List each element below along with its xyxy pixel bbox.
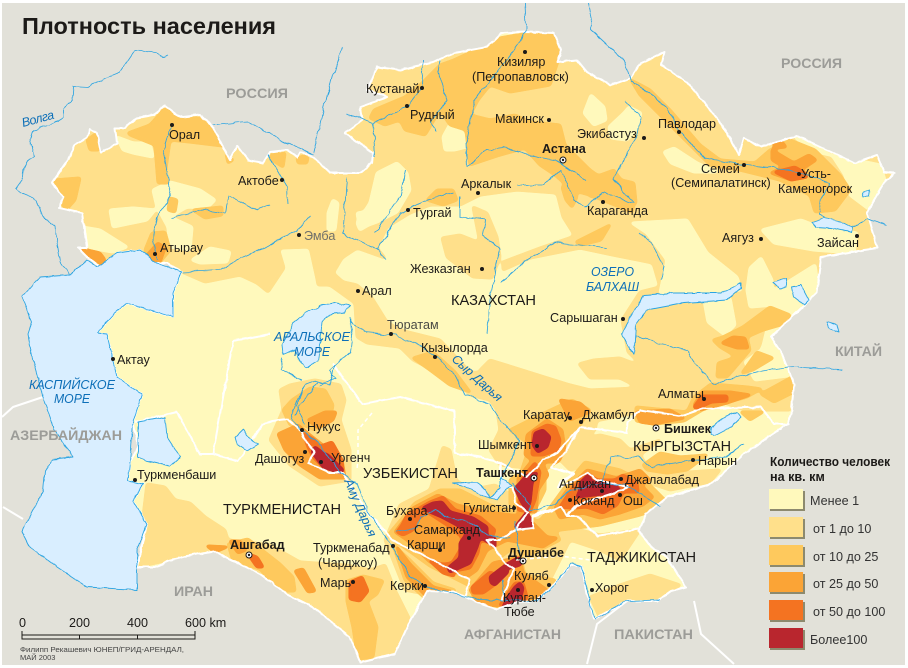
scale bar: 200 — [69, 616, 90, 630]
city labels and dots: Джамбул — [582, 408, 635, 422]
water labels: ОЗЕРО — [591, 265, 634, 279]
water labels: АРАЛЬСКОЕ — [273, 330, 351, 344]
capitals: Ашгабад — [230, 538, 285, 552]
city labels and dots: Джалалабад — [625, 473, 700, 487]
scale bar: 400 — [127, 616, 148, 630]
city labels and dots: Аркалык — [461, 177, 512, 191]
legend: 1 to 10 — [769, 517, 871, 539]
city labels and dots: Шымкент — [478, 438, 533, 452]
city labels and dots: Коканд — [573, 494, 615, 508]
water labels: Сыр Дарья — [449, 352, 505, 405]
city labels and dots: Арал — [362, 284, 392, 298]
city labels and dots: Кизиляр — [497, 55, 545, 69]
scale bar — [19, 616, 226, 639]
city labels and dots: Карши — [407, 538, 445, 552]
density 50 to 100 — [248, 167, 807, 610]
neighbouring country labels: ИРАН — [174, 583, 213, 599]
city labels and dots: Усть- — [801, 167, 831, 181]
title: Плотность населения — [22, 13, 276, 39]
neighbouring country labels: ПАКИСТАН — [614, 626, 693, 642]
water labels: Аму Дарья — [341, 476, 379, 539]
city labels and dots: Туркменабад — [313, 541, 390, 555]
city labels and dots: Тургай — [413, 206, 452, 220]
city labels and dots: Эмба — [304, 229, 335, 243]
legend: under 1: Менее 1 — [810, 494, 859, 508]
capitals: Душанбе — [508, 546, 564, 560]
city labels and dots: Дашогуз — [255, 452, 305, 466]
water labels: КАСПИЙСКОЕ — [29, 376, 116, 392]
city labels and dots: Кустанай — [366, 82, 419, 96]
city labels and dots: Каменогорск — [778, 182, 853, 196]
city labels and dots: Самарканд — [414, 523, 481, 537]
city labels and dots: Курган- — [503, 591, 546, 605]
water labels — [20, 108, 639, 539]
density over 100 — [312, 430, 620, 608]
city labels and dots: Актобе — [238, 174, 279, 188]
city labels and dots: Каратау — [523, 408, 571, 422]
legend: 50 to 100: от 50 до 100 — [813, 605, 885, 619]
city labels and dots: Андижан — [559, 477, 611, 491]
city labels and dots: Экибастуз — [577, 127, 637, 141]
density 25 to 50 — [78, 138, 816, 606]
legend: Количество человек — [770, 455, 891, 469]
legend: 25 to 50: от 25 до 50 — [813, 577, 878, 591]
water labels: БАЛХАШ — [586, 280, 639, 294]
neighbouring country labels: АФГАНИСТАН — [464, 626, 561, 642]
main country labels: КЫРГЫЗСТАН — [633, 438, 731, 455]
city labels and dots: Нукус — [307, 420, 340, 434]
city labels and dots: Сарышаган — [550, 311, 618, 325]
city labels and dots: Туркменбаши — [137, 468, 216, 482]
main country labels: УЗБЕКИСТАН — [363, 465, 458, 482]
city labels and dots: Гулистан — [463, 501, 515, 515]
city labels and dots: Семей — [701, 162, 740, 176]
scale bar: 600 km — [185, 616, 226, 630]
legend: over 100: Более100 — [810, 633, 867, 647]
scale bar: 0 — [19, 616, 26, 630]
capitals: Бишкек — [664, 422, 712, 436]
legend: under 1 — [769, 489, 859, 511]
neighbouring country labels: РОССИЯ — [781, 55, 842, 71]
city labels and dots: Жезказган — [410, 262, 471, 276]
main country labels: КАЗАХСТАН — [451, 292, 536, 309]
neighbouring country labels: АЗЕРБАЙДЖАН — [10, 426, 122, 443]
main country labels: ТУРКМЕНИСТАН — [223, 501, 341, 518]
capitals: Ташкент — [476, 466, 528, 480]
city labels and dots: Кызылорда — [421, 341, 488, 355]
city labels and dots: Аягуз — [722, 231, 754, 245]
city labels and dots: Рудный — [410, 108, 455, 122]
city labels and dots: Хорог — [595, 581, 629, 595]
water labels: МОРЕ — [294, 345, 331, 359]
city labels and dots: (Семипалатинск) — [671, 176, 771, 190]
city labels and dots: Зайсан — [817, 236, 859, 250]
legend: 1 to 10: от 1 до 10 — [813, 522, 871, 536]
Aral Sea — [282, 303, 350, 368]
credit — [20, 645, 184, 662]
neighbouring country labels: РОССИЯ — [226, 85, 288, 101]
main country labels — [223, 292, 731, 566]
city labels and dots: Тюратам — [387, 318, 439, 332]
legend: 50 to 100 — [769, 600, 885, 622]
legend: over 100 — [769, 628, 867, 650]
city labels and dots: Алматы — [658, 387, 704, 401]
water labels: МОРЕ — [54, 392, 91, 406]
city labels and dots: Керки — [390, 579, 424, 593]
city labels and dots: Орал — [169, 128, 200, 142]
neighbouring borders — [2, 397, 734, 664]
city labels and dots: Макинск — [495, 112, 544, 126]
legend: 10 to 25 — [769, 545, 878, 567]
capitals: Астана — [542, 142, 587, 156]
legend: 25 to 50 — [769, 572, 878, 594]
city labels and dots: Атырау — [160, 241, 204, 255]
lakes — [235, 190, 870, 500]
water labels: Волга — [20, 108, 56, 130]
city labels and dots: Куляб — [514, 569, 549, 583]
city labels and dots: Нарын — [698, 454, 737, 468]
neighbouring country labels: КИТАЙ — [835, 342, 882, 359]
main country labels: ТАДЖИКИСТАН — [587, 549, 696, 566]
city labels and dots — [111, 50, 859, 619]
legend: 10 to 25: от 10 до 25 — [813, 550, 878, 564]
city labels and dots: Марь — [320, 576, 352, 590]
legend — [769, 455, 891, 650]
city labels and dots: (Чарджоу) — [318, 556, 377, 570]
density lightest gaps — [82, 95, 885, 380]
city labels and dots: Тюбе — [504, 605, 535, 619]
credit: МАЙ 2003 — [20, 653, 55, 662]
city labels and dots: Павлодар — [658, 117, 716, 131]
Kara-Bogaz bay — [138, 417, 180, 466]
city labels and dots: Ургенч — [331, 451, 370, 465]
city labels and dots: Актау — [117, 353, 151, 367]
city labels and dots: Караганда — [587, 204, 648, 218]
dashed border — [357, 413, 372, 470]
Caspian Sea — [22, 250, 182, 590]
city labels and dots: Ош — [623, 494, 643, 508]
legend: на кв. км — [770, 470, 825, 484]
city labels and dots: (Петропавловск) — [472, 70, 569, 84]
city labels and dots: Бухара — [386, 504, 427, 518]
capitals — [230, 142, 712, 564]
credit: Филипп Рекашевич ЮНЕП/ГРИД-АРЕНДАЛ, — [20, 645, 184, 654]
